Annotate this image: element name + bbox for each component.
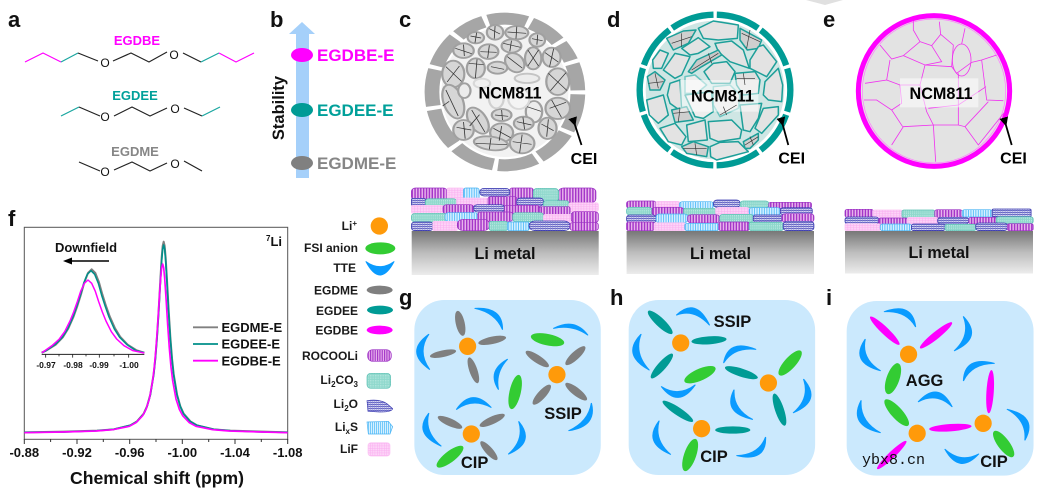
inset zoomed peak: -1.00	[119, 360, 139, 370]
legend labels: O	[349, 397, 358, 411]
NCM811 label c: NCM811	[479, 84, 541, 102]
label g: g	[399, 285, 412, 310]
x-axis tick labels	[9, 445, 303, 460]
nucleus label: Li	[270, 234, 282, 249]
legend labels: EGDBE	[315, 324, 358, 338]
EGDEE structure	[61, 88, 220, 124]
panel b: stability arrow	[270, 7, 396, 178]
x-axis tick labels: -1.08	[273, 445, 303, 460]
CEI callout e	[1000, 122, 1027, 168]
CEI callout d: CEI	[778, 150, 805, 168]
legend labels: TTE	[333, 261, 356, 275]
marker EGDBE-E: EGDBE-E	[317, 46, 394, 65]
x-axis title: Chemical shift (ppm)	[70, 468, 244, 488]
EGDBE structure: EGDBE	[114, 33, 160, 48]
marker EGDEE-E: EGDEE-E	[317, 101, 394, 120]
EGDEE structure: EGDEE	[112, 88, 158, 103]
panel d: NCM811 with teal CEI	[607, 7, 805, 168]
legend labels: EGDME	[314, 284, 358, 298]
layered SEI blocks 2	[627, 200, 814, 231]
Li metal slab 3	[845, 231, 1033, 274]
x-axis tick labels: -0.92	[62, 445, 92, 460]
legend labels: +	[352, 219, 357, 228]
x-axis tick labels: -0.88	[9, 445, 39, 460]
SEI stack: medium layer on Li metal	[627, 200, 814, 274]
CEI callout c	[571, 122, 597, 168]
solvation box i	[847, 301, 1034, 476]
legend labels: Li	[320, 373, 331, 387]
EGDEE structure: O	[100, 110, 110, 124]
legend labels: FSI anion	[304, 241, 358, 255]
legend labels: 2	[344, 404, 349, 413]
EGDBE structure	[25, 33, 254, 70]
species legend	[302, 217, 395, 456]
CIP label i: CIP	[980, 453, 1008, 471]
NCM811 label e: NCM811	[910, 85, 972, 103]
label a: a	[8, 7, 21, 32]
marker EGDME-E: EGDME-E	[317, 154, 396, 173]
CEI callout e: CEI	[1000, 150, 1027, 168]
label d: d	[607, 7, 620, 32]
watermark: ybx8.cn	[862, 452, 925, 469]
label e: e	[823, 7, 835, 32]
legend labels	[302, 219, 359, 456]
downfield arrow	[55, 240, 117, 264]
CEI callout c: CEI	[571, 151, 597, 168]
x-axis tick labels: -1.00	[167, 445, 197, 460]
panel g: solvation EGDME	[399, 285, 601, 475]
legend labels: LiF	[340, 442, 358, 456]
label f: f	[8, 206, 16, 231]
AGG label: AGG	[906, 372, 943, 390]
panel a: molecular structures	[8, 7, 254, 179]
Li metal slab 2	[627, 231, 814, 274]
inset zoomed peak	[36, 269, 144, 370]
label h: h	[610, 285, 623, 310]
panel f: 7Li NMR chart	[8, 206, 303, 488]
legend labels: Li	[342, 219, 352, 233]
EGDME structure: EGDME	[111, 144, 159, 159]
legend labels: S	[350, 420, 358, 434]
stability axis title: Stability	[270, 75, 288, 140]
stability arrow	[289, 22, 315, 178]
legend labels: 3	[354, 380, 359, 389]
legend labels: CO	[336, 373, 354, 387]
panel e: NCM811 with magenta CEI	[823, 7, 1027, 168]
Li metal slab 2: Li metal	[690, 245, 751, 263]
legend labels: Li	[334, 397, 344, 411]
legend labels: 2	[331, 380, 336, 389]
Li metal slab 1: Li metal	[474, 245, 536, 263]
SEI stack: thick layer on Li metal	[411, 188, 599, 275]
EGDBE structure: O	[169, 48, 179, 62]
panel i: solvation EGDBE	[826, 285, 1034, 476]
particle drawing e	[858, 16, 1010, 166]
layered SEI blocks 1	[411, 188, 598, 231]
EGDEE structure: O	[170, 102, 180, 116]
inset zoomed peak: -0.98	[63, 360, 83, 370]
CIP label h: CIP	[700, 448, 728, 466]
legend icons	[365, 217, 395, 456]
label b: b	[270, 7, 283, 32]
legend labels: ROCOOLi	[302, 349, 358, 363]
CIP label g: CIP	[461, 454, 488, 472]
EGDME structure: O	[100, 165, 110, 179]
solvation box h	[629, 300, 815, 475]
NCM811 label d: NCM811	[691, 88, 754, 106]
decorative corner shape	[806, 0, 843, 5]
EGDME structure: O	[170, 157, 180, 171]
panel h: solvation EGDEE	[610, 285, 815, 475]
particle drawing c	[432, 19, 578, 165]
chart legend	[193, 320, 282, 368]
panel c: NCM811 with gray CEI	[399, 7, 597, 168]
label i: i	[826, 285, 832, 310]
x-axis tick labels: -1.04	[220, 445, 251, 460]
EGDBE structure: O	[100, 56, 110, 70]
chart legend: EGDBE-E	[222, 354, 281, 368]
downfield arrow: Downfield	[55, 240, 117, 255]
solvation box g	[414, 300, 601, 475]
plot frame and ticks	[24, 227, 288, 444]
legend labels: Li	[335, 420, 346, 434]
inset zoomed peak: -0.99	[89, 360, 109, 370]
Li metal slab 1	[412, 231, 599, 275]
legend labels: EGDEE	[316, 304, 358, 318]
CEI callout d	[778, 122, 805, 168]
legend labels: x	[346, 427, 351, 436]
x-axis tick labels: -0.96	[115, 445, 145, 460]
SSIP label h: SSIP	[714, 313, 751, 331]
label c: c	[399, 7, 411, 32]
EGDME structure	[79, 144, 202, 179]
particle drawing d	[640, 15, 790, 165]
nucleus label: 7	[266, 234, 271, 243]
inset zoomed peak: -0.97	[36, 360, 56, 370]
SEI stack: thin layer on Li metal	[845, 209, 1033, 274]
layered SEI blocks 3	[845, 209, 1033, 231]
SSIP label g: SSIP	[544, 405, 582, 423]
Li metal slab 3: Li metal	[908, 244, 970, 262]
chart legend: EGDME-E	[222, 320, 282, 335]
chart legend: EGDEE-E	[222, 336, 280, 352]
spectrum curves	[24, 242, 288, 433]
